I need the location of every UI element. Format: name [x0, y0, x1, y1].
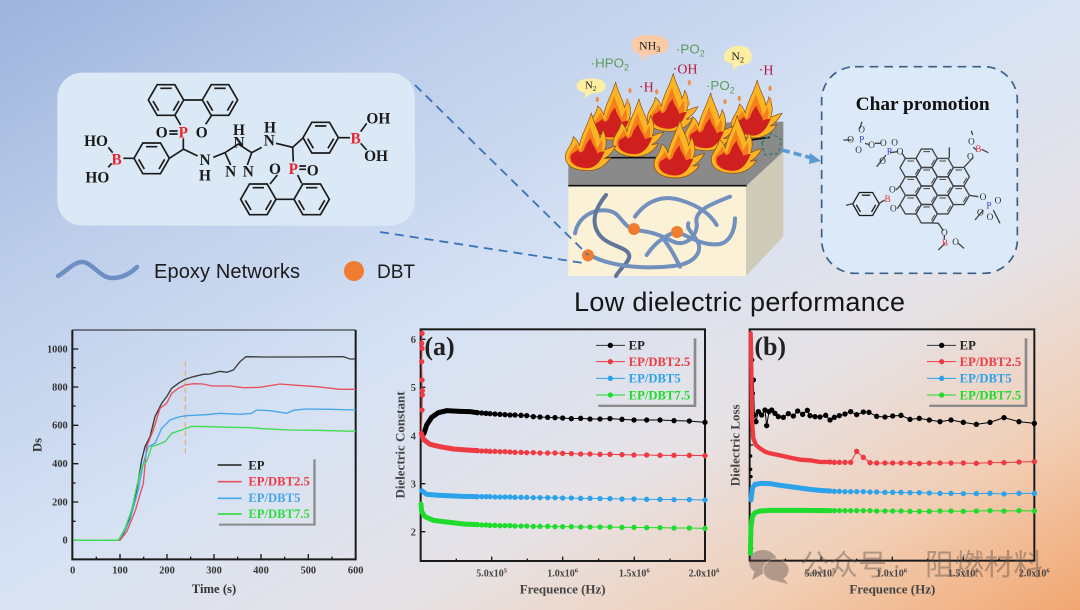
gas bubbles: 3 — [656, 45, 660, 54]
legend — [927, 338, 1027, 407]
molecule atom labels — [84, 110, 390, 187]
axis labels: 4 — [411, 431, 417, 442]
axis labels: Dielectric Loss — [728, 404, 743, 486]
radical labels: 2 — [700, 49, 705, 59]
legend: EP/DBT5 — [248, 491, 300, 505]
axis labels: 5.0x10 — [476, 569, 504, 580]
legend — [218, 458, 316, 526]
molecule atom labels: HO — [85, 170, 109, 187]
axis labels: 5.0x10 — [805, 569, 832, 580]
series EP — [424, 411, 705, 433]
axis ticks — [750, 353, 999, 561]
axis labels: 6 — [904, 567, 908, 574]
axis labels: 600 — [348, 566, 363, 577]
char graphene structure: O — [977, 208, 984, 218]
axis ticks — [421, 339, 670, 561]
legend: EP/DBT5 — [960, 372, 1012, 386]
chart: Ds versus time — [30, 330, 363, 596]
molecule atom labels: OH — [366, 110, 390, 127]
radical labels: 2 — [730, 85, 735, 95]
series EP/DBT7.5 — [421, 504, 705, 528]
axis labels: 300 — [206, 566, 222, 577]
curve EP/DBT2.5 — [73, 384, 356, 540]
radical labels — [591, 41, 773, 95]
char graphene structure: O — [980, 193, 987, 203]
axis labels: 0 — [70, 566, 75, 577]
axis labels: 400 — [253, 566, 269, 577]
molecule atom labels: N — [264, 133, 275, 150]
legend: epoxy networks and DBT: Epoxy Networks — [154, 261, 300, 283]
series EP/DBT7.5 — [750, 510, 1034, 553]
legend: EP/DBT7.5 — [960, 388, 1021, 402]
dashed marker at 240 s — [183, 362, 187, 453]
legend: epoxy networks and DBT: DBT — [377, 262, 415, 283]
DBT particles — [582, 223, 683, 261]
molecule atom labels: N — [199, 152, 211, 169]
flames — [565, 73, 782, 178]
molecule atom labels: P — [289, 161, 298, 178]
molecule atom labels: N — [225, 164, 236, 181]
axis labels: 5 — [504, 567, 508, 574]
axis labels — [30, 344, 363, 596]
plot frame — [421, 329, 705, 561]
char graphene structure: O — [889, 186, 896, 196]
series EP/DBT5 — [751, 483, 1034, 500]
char graphene structure: O — [941, 228, 948, 238]
axis labels: 6 — [575, 567, 579, 574]
radical labels: ·OH — [673, 62, 698, 77]
icon: upper biphenyl rings — [134, 85, 338, 215]
watermark: 阻燃材料 — [925, 549, 1043, 582]
axis labels: 5 — [832, 567, 836, 574]
watermark — [749, 549, 1043, 584]
axis labels: Dielectric Constant — [393, 391, 408, 499]
panel: char promotion — [822, 67, 1017, 273]
legend — [596, 338, 696, 407]
gas bubbles — [577, 35, 752, 98]
axis labels: 400 — [52, 459, 68, 470]
legend: EP/DBT2.5 — [248, 475, 310, 489]
char graphene structure: O — [855, 146, 862, 156]
legend: EP/DBT7.5 — [248, 507, 310, 521]
axis labels: 6 — [1046, 567, 1050, 574]
chart b: dielectric loss — [728, 329, 1050, 596]
axis labels — [393, 335, 720, 596]
dashed char zoom marker — [762, 133, 782, 155]
chart a: dielectric constant — [393, 329, 720, 596]
radical labels: ·H — [759, 64, 773, 79]
molecule atom labels: OH — [364, 148, 388, 165]
char graphene structure: O — [890, 204, 897, 214]
molecule atom labels: H — [199, 168, 211, 185]
series EP/DBT2.5 — [751, 333, 1034, 464]
heading: Char promotion: Char promotion — [856, 94, 990, 115]
char graphene structure: O — [995, 196, 1002, 206]
molecule atom labels: B — [351, 130, 361, 147]
axis labels: 6 — [975, 567, 979, 574]
axis labels: 6 — [646, 567, 650, 574]
axis labels: 1.0x10 — [876, 569, 904, 580]
axis labels: 200 — [159, 566, 175, 577]
axis labels: 100 — [112, 566, 128, 577]
panel tag (a): (a) — [424, 332, 455, 361]
char graphene structure — [843, 122, 1002, 250]
molecule atom labels: N — [233, 134, 245, 151]
axis labels: Time (s) — [192, 582, 236, 596]
axis labels: 0 — [62, 536, 68, 547]
char graphene structure: O — [868, 141, 875, 151]
axis labels: Frequence (Hz) — [849, 581, 935, 596]
molecule atom labels: H — [264, 119, 276, 136]
series EP/DBT2.5 — [421, 333, 705, 456]
radical labels: ·PO — [706, 78, 730, 93]
axis ticks — [72, 349, 332, 559]
panel tag (b): (b) — [754, 332, 786, 361]
radical labels: ·H — [639, 80, 654, 95]
char graphene structure: O — [858, 126, 865, 136]
arrow: dashed to char promotion — [782, 150, 821, 164]
gas bubbles: 2 — [593, 84, 597, 93]
legend: EP/DBT5 — [629, 372, 681, 386]
panel: DBT molecule structure — [57, 73, 415, 226]
axis labels: 200 — [52, 497, 68, 508]
gas bubbles: N — [731, 49, 740, 63]
curve EP/DBT7.5 — [73, 426, 356, 540]
block right face — [746, 152, 783, 276]
legend: EP — [960, 339, 976, 353]
gas bubbles: N — [585, 80, 593, 91]
molecule atom labels: O — [307, 163, 319, 180]
char graphene structure: P — [986, 202, 992, 212]
illustration: burning epoxy block — [565, 35, 783, 276]
watermark: · — [892, 550, 902, 582]
legend: EP — [629, 339, 645, 353]
radical labels: ·HPO — [591, 55, 624, 70]
char graphene structure: P — [887, 148, 892, 158]
axis labels: Frequence (Hz) — [520, 581, 606, 596]
char graphene structure: O — [968, 138, 975, 148]
heading: Low dielectric performance: Low dielectric performance — [574, 287, 905, 317]
char graphene structure: O — [891, 138, 898, 148]
molecule atom labels: O — [156, 124, 168, 141]
char graphene structure: B — [885, 195, 891, 205]
gas bubbles: 2 — [740, 56, 744, 65]
axis labels: 6 — [716, 567, 720, 574]
legend: EP/DBT2.5 — [960, 355, 1021, 369]
molecule atom labels: O — [269, 161, 281, 178]
char graphene structure: B — [942, 239, 948, 249]
series EP — [749, 360, 1034, 478]
molecule atom labels: O — [196, 124, 208, 141]
plot frame — [72, 330, 356, 559]
axis labels: 800 — [52, 382, 68, 393]
char graphene structure: O — [879, 157, 886, 167]
radical labels: ·PO — [676, 41, 700, 56]
molecule atom labels: HO — [84, 133, 108, 150]
axis labels: 1.5x10 — [619, 569, 646, 580]
dashed connector lines — [380, 85, 588, 263]
char graphene structure: O — [952, 238, 959, 248]
watermark: 公众号 — [800, 550, 887, 582]
curve EP/DBT5 — [73, 409, 356, 540]
char layer top — [568, 122, 783, 186]
molecule atom labels: N — [243, 164, 254, 181]
axis labels: 2.0x10 — [1019, 569, 1046, 580]
legend: EP/DBT7.5 — [629, 388, 690, 402]
axis labels: 5 — [411, 383, 416, 394]
icon: chat bubbles — [749, 550, 789, 584]
axis labels: 2.0x10 — [689, 569, 716, 580]
epoxy network chains — [575, 195, 735, 276]
axis labels: 1.5x10 — [948, 569, 975, 580]
legend: epoxy networks and DBT — [58, 261, 415, 283]
char graphene structure: O — [967, 152, 974, 162]
axis labels: 500 — [301, 566, 316, 577]
char graphene structure: B — [975, 145, 981, 155]
gas bubbles: NH — [639, 38, 656, 52]
molecule atom labels: P — [179, 124, 188, 141]
axis labels: 1000 — [47, 344, 68, 355]
molecule atom labels: B — [112, 151, 122, 168]
axis labels — [728, 404, 1050, 596]
char graphene structure: O — [987, 213, 994, 223]
char graphene structure: O — [847, 135, 854, 145]
axis labels: Ds — [30, 438, 44, 452]
plot frame — [750, 329, 1034, 561]
molecule atom labels: H — [233, 122, 245, 139]
legend: EP — [248, 458, 265, 472]
series EP/DBT5 — [422, 491, 705, 500]
legend: EP/DBT2.5 — [629, 355, 690, 369]
axis labels: 1.0x10 — [547, 569, 575, 580]
radical labels: 2 — [624, 63, 629, 73]
axis labels: 6 — [411, 335, 417, 346]
axis labels: 2 — [411, 527, 416, 538]
block front face — [568, 187, 746, 276]
molecule bonds — [108, 100, 367, 199]
char graphene structure: O — [880, 139, 887, 149]
char graphene structure: P — [859, 135, 864, 145]
curve EP — [73, 357, 356, 540]
axis labels: 3 — [411, 479, 416, 490]
char graphene structure: O — [897, 148, 904, 158]
axis labels: 600 — [52, 421, 68, 432]
